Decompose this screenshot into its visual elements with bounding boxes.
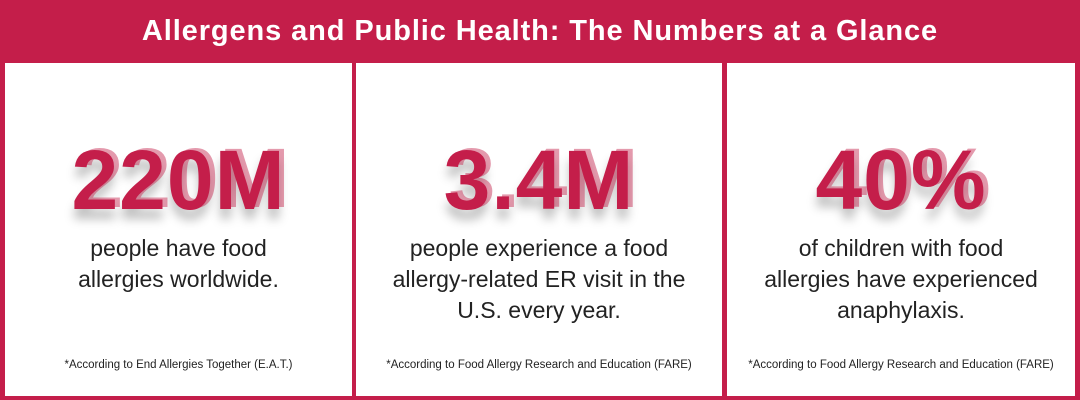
description: allergies worldwide.: [78, 266, 279, 292]
footnote: *According to Food Allergy Research and Education (FARE): [748, 359, 1054, 371]
description: people have food: [90, 235, 267, 261]
description: allergy-related ER visit in the: [393, 266, 685, 292]
panel: 40%: [727, 63, 1075, 396]
footnote: *According to Food Allergy Research and Education (FARE): [386, 359, 692, 371]
big number: 220M: [71, 133, 286, 227]
description: allergies have experienced: [764, 266, 1038, 292]
description: [764, 235, 1038, 323]
footnote: *According to End Allergies Together (E.A.T.): [64, 359, 292, 371]
big number: 40%: [815, 133, 987, 227]
description: [78, 235, 279, 292]
description: of children with food: [799, 235, 1003, 261]
panel: 3.4M: [356, 63, 722, 396]
description: people experience a food: [410, 235, 668, 261]
big number: 3.4M: [444, 133, 634, 227]
title: Allergens and Public Health: The Numbers at a Glance: [142, 15, 938, 47]
panel: 220M: [5, 63, 352, 396]
description: U.S. every year.: [457, 297, 621, 323]
description: anaphylaxis.: [837, 297, 965, 323]
description: [393, 235, 685, 323]
